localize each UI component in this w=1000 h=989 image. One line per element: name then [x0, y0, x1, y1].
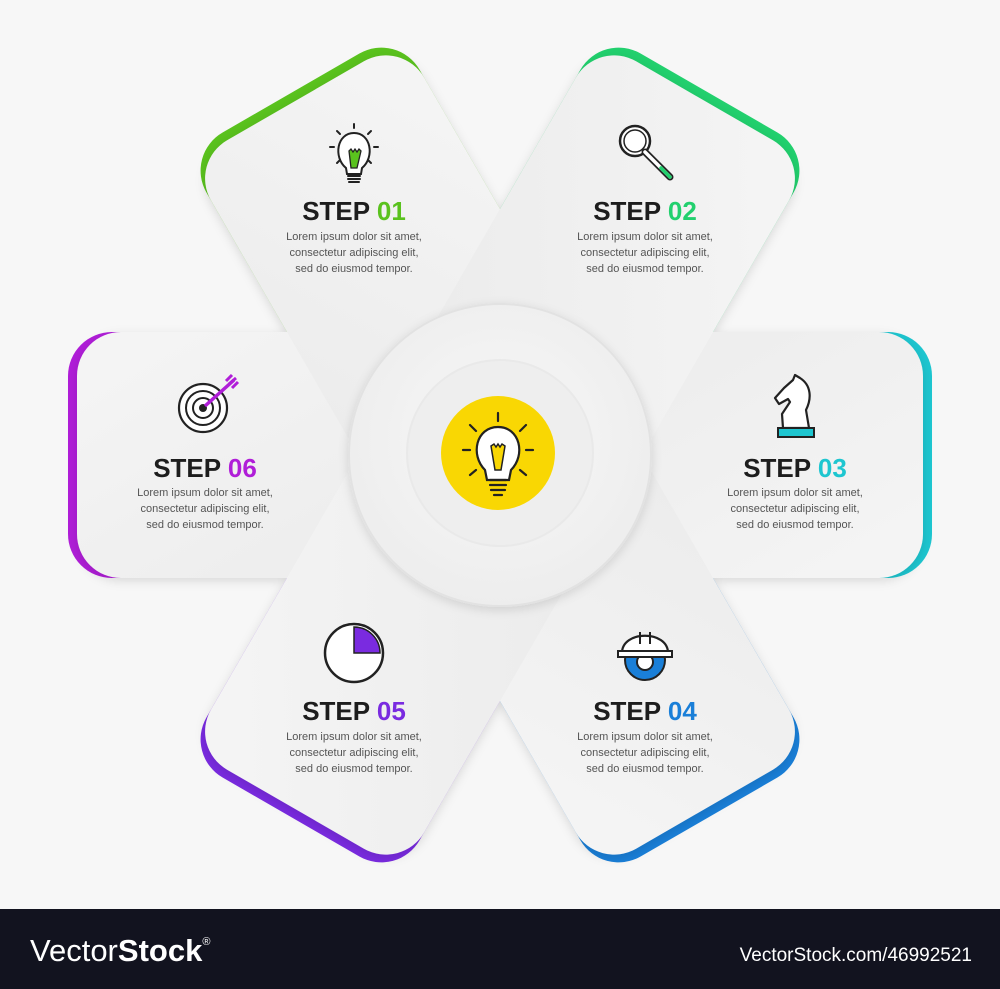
- step 03: Lorem ipsum dolor sit amet,: [727, 487, 863, 499]
- step 06: sed do eiusmod tempor.: [146, 519, 264, 531]
- step 05: consectetur adipiscing elit,: [289, 747, 419, 759]
- step 04: STEP 04: [593, 696, 697, 726]
- icon: chess knight: [775, 375, 814, 437]
- step 04: [577, 632, 713, 775]
- step 06: STEP 06: [153, 453, 257, 483]
- icon: light bulb: [330, 124, 378, 182]
- colored arm edges: [68, 32, 932, 878]
- icon: target: [179, 375, 238, 432]
- step 01: Lorem ipsum dolor sit amet,: [286, 231, 422, 243]
- step 02: STEP 02: [593, 196, 697, 226]
- step 03: consectetur adipiscing elit,: [730, 503, 860, 515]
- step 06: consectetur adipiscing elit,: [140, 503, 270, 515]
- step 01: STEP 01: [302, 196, 406, 226]
- step 05: Lorem ipsum dolor sit amet,: [286, 731, 422, 743]
- footer bar: VectorStock: [30, 933, 202, 968]
- step 02: consectetur adipiscing elit,: [580, 247, 710, 259]
- step 01: [286, 124, 422, 275]
- step 05: [286, 624, 422, 775]
- step 05: STEP 05: [302, 696, 406, 726]
- step 04: sed do eiusmod tempor.: [586, 763, 704, 775]
- grey arms: [77, 39, 923, 871]
- step 04: consectetur adipiscing elit,: [580, 747, 710, 759]
- step 01: consectetur adipiscing elit,: [289, 247, 419, 259]
- step 01: sed do eiusmod tempor.: [295, 263, 413, 275]
- footer bar: ®: [202, 936, 210, 948]
- step 02: Lorem ipsum dolor sit amet,: [577, 231, 713, 243]
- center circle: [349, 304, 651, 606]
- icon: magnifier: [620, 126, 670, 177]
- step 02: [577, 126, 713, 275]
- step 03: sed do eiusmod tempor.: [736, 519, 854, 531]
- icon: helmet gear: [618, 632, 672, 680]
- footer bar: [0, 909, 1000, 989]
- step 03: [727, 375, 863, 531]
- step 02: sed do eiusmod tempor.: [586, 263, 704, 275]
- step 05: sed do eiusmod tempor.: [295, 763, 413, 775]
- step 06: Lorem ipsum dolor sit amet,: [137, 487, 273, 499]
- step 04: Lorem ipsum dolor sit amet,: [577, 731, 713, 743]
- step 06: [137, 375, 273, 531]
- icon: center bulb: [441, 396, 555, 510]
- step 03: STEP 03: [743, 453, 847, 483]
- footer bar: VectorStock.com/46992521: [740, 945, 972, 966]
- icon: clock: [325, 624, 383, 682]
